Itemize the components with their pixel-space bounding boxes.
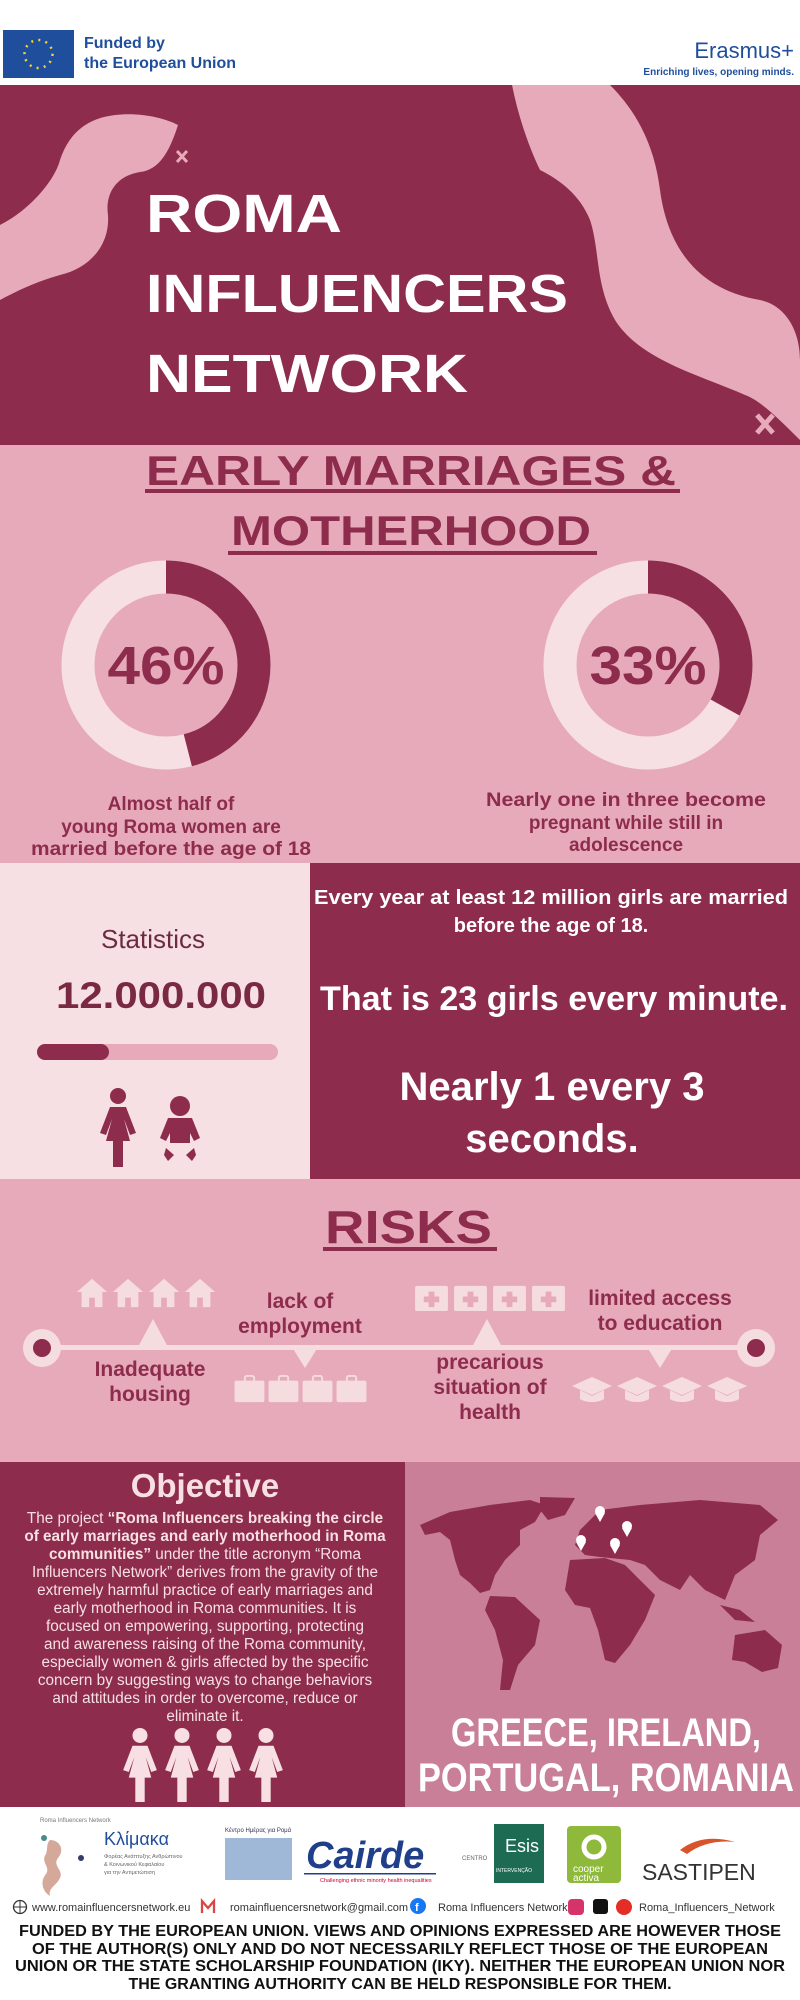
- icon: x mark: [757, 415, 773, 433]
- hero panel: [0, 85, 800, 445]
- risk labels: to education: [598, 1312, 722, 1335]
- panel: map and countries: [405, 1462, 800, 1807]
- risk labels: limited access: [588, 1287, 732, 1310]
- disclaimer: FUNDED BY THE EUROPEAN UNION. VIEWS AND OPINIONS EXPRESSED ARE HOWEVER THOSE: [19, 1923, 781, 1940]
- risk labels: precarious: [436, 1351, 544, 1374]
- risk labels: health: [459, 1401, 521, 1424]
- caption: 46%: Almost half of: [108, 794, 235, 815]
- title: ROMA: [146, 184, 342, 244]
- risk labels: employment: [238, 1315, 362, 1338]
- logo: Cairde: Cairde: [306, 1835, 424, 1877]
- panel: statistics right: [310, 863, 800, 1179]
- logo: day centre: [225, 1827, 292, 1880]
- Erasmus+ logo: [643, 38, 794, 78]
- disclaimer: OF THE AUTHOR(S) ONLY AND DO NOT NECESSARILY REFLECT THOSE OF THE EUROPEAN: [32, 1941, 768, 1958]
- title: [146, 184, 568, 404]
- decorative right shape: [512, 85, 800, 440]
- risk labels: Inadequate: [95, 1358, 205, 1381]
- caption: 33%: Nearly one in three become: [486, 790, 766, 811]
- icon: x mark: [177, 151, 187, 162]
- EU funding text: Funded by: [84, 35, 165, 52]
- logo: SASTIPEN: SASTIPEN: [642, 1859, 756, 1885]
- donut chart: 46%: 46%: [108, 636, 224, 696]
- caption: 33%: [486, 790, 766, 856]
- EU funding text: the European Union: [84, 55, 236, 72]
- donut chart: 46%: [78, 577, 254, 753]
- decorative left shape: [0, 114, 178, 300]
- icon: facebook: f: [415, 1902, 419, 1914]
- caption: 33%: pregnant while still in: [529, 813, 723, 834]
- panel: statistics left: [0, 863, 310, 1179]
- caption: 46%: [31, 794, 311, 860]
- logo: SASTIPEN: [642, 1839, 756, 1885]
- paragraph: concern by suggesting ways to change behaviors: [38, 1672, 372, 1689]
- risk labels: situation of: [433, 1376, 548, 1399]
- logo: network: Roma Influencers Network: [40, 1818, 112, 1824]
- countries text: [418, 1711, 794, 1800]
- paragraph: and awareness raising of the Roma community,: [44, 1636, 366, 1653]
- logo: ESIS: [462, 1824, 544, 1883]
- paragraph: and attitudes in order to overcome, reduce or: [52, 1690, 358, 1707]
- logo: network: [40, 1818, 112, 1896]
- icons: briefcases: [235, 1376, 366, 1402]
- icon: woman: [100, 1088, 136, 1167]
- paragraph: extremely harmful practice of early marriages and: [37, 1582, 373, 1599]
- contact row: [14, 1898, 775, 1915]
- paragraph: focused on empowering, supporting, protecting: [46, 1618, 364, 1635]
- risk labels: [95, 1287, 732, 1424]
- logo: Klimaka: για την Αντιμετώπιση: [104, 1869, 155, 1876]
- paragraph: [24, 1510, 386, 1725]
- heading: MOTHERHOOD: [231, 507, 591, 554]
- caption: 46%: young Roma women are: [61, 817, 281, 838]
- logo: cooper activa: cooper: [573, 1864, 604, 1875]
- text block: before the age of 18.: [454, 915, 648, 937]
- logo: Klimaka: & Κοινωνικού Κεφαλαίου: [104, 1861, 164, 1868]
- contact row: www.romainfluencersnetwork.eu: [31, 1902, 190, 1914]
- paragraph: communities” under the title acronym “Roma: [49, 1546, 361, 1563]
- heading: EARLY MARRIAGES &: [146, 447, 676, 494]
- logo: Klimaka: Κλίμακα: [104, 1829, 169, 1849]
- heading: [145, 447, 680, 555]
- contact row: romainfluencersnetwork@gmail.com: [230, 1902, 408, 1914]
- paragraph: early motherhood in Roma communities. It is: [54, 1600, 357, 1617]
- text block: [314, 887, 788, 1161]
- paragraph: especially women & girls affected by the specific: [41, 1654, 369, 1671]
- Erasmus+ logo: Enriching lives, opening minds.: [643, 67, 794, 78]
- icon: baby: [160, 1096, 200, 1161]
- panel: risks: [0, 1179, 800, 1462]
- disclaimer: [15, 1923, 785, 1993]
- text block: That is 23 girls every minute.: [320, 980, 788, 1018]
- risk labels: lack of: [267, 1290, 334, 1313]
- icon: gmail: [202, 1901, 214, 1913]
- logo: Cairde: Challenging ethnic minority health inequalities: [320, 1878, 432, 1884]
- EU funding text: [84, 35, 236, 72]
- icons: graduation caps: [572, 1377, 747, 1402]
- icon: EU flag: [3, 30, 74, 78]
- heading: RISKS: RISKS: [325, 1201, 492, 1253]
- logo: ESIS: CENTRO: [462, 1856, 488, 1862]
- disclaimer: UNION OR THE STATE SCHOLARSHIP FOUNDATION (IKY). NEITHER THE EUROPEAN UNION NOR: [15, 1958, 785, 1975]
- text block: Every year at least 12 million girls are married: [314, 887, 788, 909]
- paragraph: of early marriages and early motherhood in Roma: [24, 1528, 386, 1545]
- heading: Objective: Objective: [131, 1467, 279, 1504]
- Erasmus+ logo: Erasmus+: [694, 38, 794, 63]
- map pins: [576, 1506, 632, 1554]
- header bar: [0, 0, 800, 85]
- text block: seconds.: [465, 1117, 639, 1161]
- icon: globe: [14, 1900, 26, 1914]
- caption: 33%: adolescence: [569, 835, 683, 856]
- paragraph: Influencers Network” derives from the gravity of the: [32, 1564, 378, 1581]
- logo: cooper activa: [567, 1826, 621, 1884]
- label: Statistics: Statistics: [101, 924, 205, 954]
- title: NETWORK: [146, 344, 468, 404]
- caption: 46%: married before the age of 18: [31, 839, 311, 860]
- icon: facebook: [410, 1898, 426, 1914]
- title: INFLUENCERS: [146, 264, 568, 324]
- risk labels: housing: [109, 1383, 191, 1406]
- timeline: [23, 1319, 775, 1368]
- paragraph: eliminate it.: [166, 1708, 244, 1725]
- world map: [420, 1497, 782, 1690]
- text block: Nearly 1 every 3: [400, 1065, 704, 1109]
- logo: ESIS: Esis: [505, 1836, 539, 1856]
- icons: instagram tiktok youtube: [568, 1899, 632, 1915]
- icons: four women: [123, 1728, 283, 1802]
- logo: ESIS: INTERVENÇÃO: [496, 1867, 532, 1874]
- donut chart: 33%: 33%: [590, 636, 706, 696]
- donut chart: 33%: [560, 577, 736, 753]
- number: 12.000.000: 12.000.000: [56, 975, 266, 1016]
- contact row: Roma_Influencers_Network: [639, 1902, 775, 1914]
- progress bar: [37, 1044, 278, 1060]
- logo: Klimaka: Φορέας Ανάπτυξης Ανθρώπινου: [104, 1853, 183, 1860]
- contact row: Roma Influencers Network: [438, 1902, 568, 1914]
- partner logos: [0, 1807, 800, 1902]
- logo: day centre: Κέντρο Ημέρας για Ρομά: [225, 1827, 292, 1834]
- logo: Klimaka: [104, 1829, 183, 1876]
- disclaimer: THE GRANTING AUTHORITY CAN BE HELD RESPONSIBLE FOR THEM.: [128, 1976, 672, 1993]
- panel: early marriages & motherhood: [0, 445, 800, 863]
- icons: houses: [77, 1279, 215, 1307]
- paragraph: The project “Roma Influencers breaking the circle: [27, 1510, 383, 1527]
- icons: medical kits: [415, 1286, 565, 1311]
- panel: objective: [0, 1462, 405, 1807]
- logo: cooper activa: activa: [573, 1873, 600, 1884]
